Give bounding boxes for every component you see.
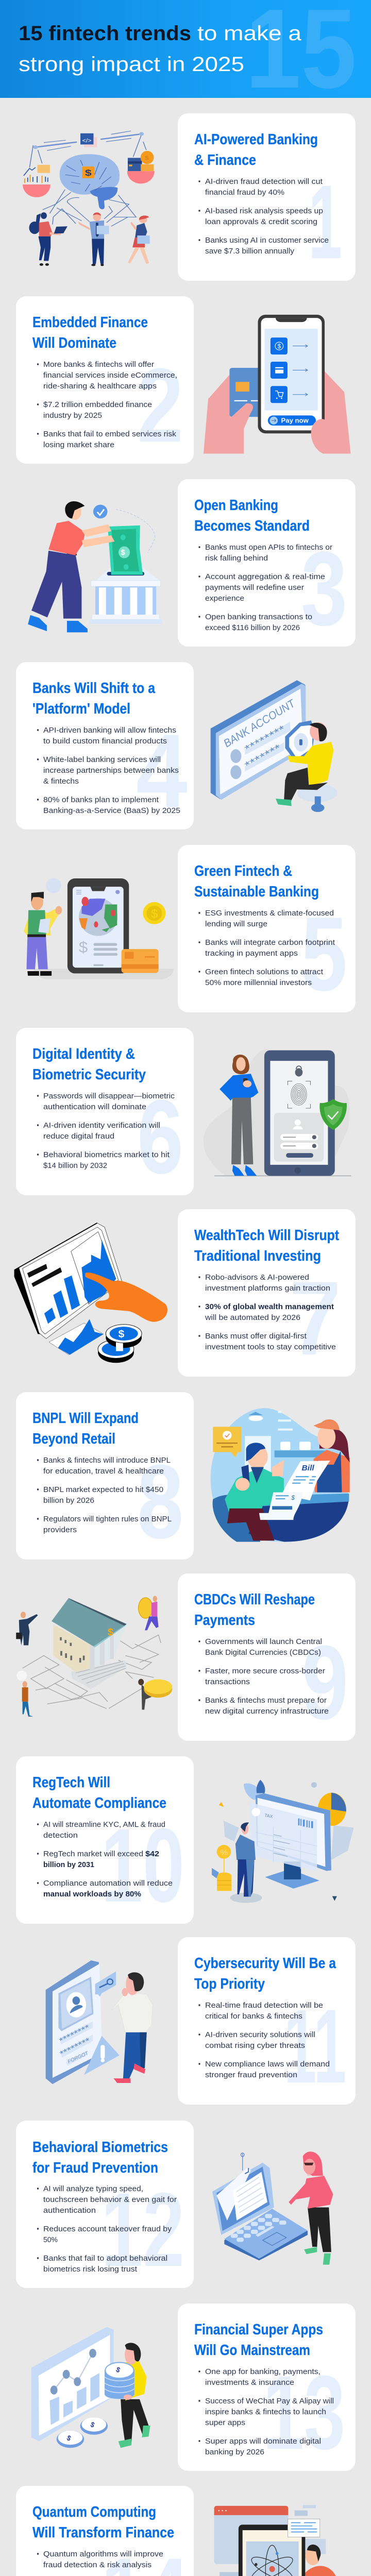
heading: [32, 314, 148, 351]
bullet list: One app for banking, payments,: [205, 2368, 321, 2376]
title: to make a: [197, 22, 302, 45]
panel: 10 regtech: [16, 1756, 194, 1924]
bullet list: investments & insurance: [205, 2379, 294, 2387]
bullet list: [37, 2185, 177, 2274]
bullet list: [37, 1821, 173, 1899]
bullet list: [198, 178, 329, 256]
bullet list: lending will surge: [205, 920, 267, 928]
bullet list: save $7.3 billion annually: [205, 247, 295, 256]
number 7: 7: [289, 1260, 341, 1377]
bullet list: financial services inside eCommerce,: [43, 371, 177, 380]
bullet list: banking by 2026: [205, 2448, 264, 2456]
heading: [194, 497, 310, 534]
bullet list: financial fraud by 40%: [205, 189, 284, 197]
bullet list: tracking in payment apps: [205, 950, 298, 958]
illustration: man and phone login screen: [46, 1960, 153, 2084]
illustration: man reviewing tax form on monitor: [212, 1780, 354, 1903]
bullet list: ESG investments & climate-focused: [205, 909, 334, 918]
heading: [194, 131, 318, 168]
heading: & Finance: [194, 152, 256, 168]
bullet list: [198, 909, 335, 987]
number 3: 3: [301, 530, 347, 648]
bullet list: biometrics risk losing trust: [43, 2265, 137, 2274]
bullet list: Reduces account takeover fraud by: [43, 2225, 172, 2233]
bullet list: industry by 2025: [43, 412, 102, 420]
illustration: phone with globe, man and card: $: [79, 939, 88, 956]
bullet list: Banks & fintechs will introduce BNPL: [43, 1456, 171, 1465]
bullet list: losing market share: [43, 441, 114, 449]
heading: WealthTech Will Disrupt: [194, 1227, 339, 1244]
bullet list: Banks using AI in customer service: [205, 236, 329, 245]
bullet list: risk falling behind: [205, 554, 268, 563]
heading: CBDCs Will Reshape: [194, 1591, 315, 1608]
illustration: monitor chart with hand and coins: [14, 1223, 167, 1363]
panel: 13 super apps: [178, 2303, 356, 2471]
bullet list: 30% of global wealth management: [205, 1303, 334, 1311]
heading: Financial Super Apps: [194, 2321, 323, 2338]
number 12: 12: [101, 2171, 184, 2289]
bullet list: Banking-as-a-Service (BaaS) by 2025: [43, 807, 180, 815]
bullet list: $42: [145, 1850, 159, 1858]
heading: [32, 680, 156, 717]
illustration: AI brain and scales: </>: [82, 138, 92, 144]
bullet list: AI-driven fraud detection will cut: [205, 178, 323, 186]
panel: 7 wealthtech: [178, 1209, 356, 1377]
heading: [32, 2504, 174, 2541]
illustration: man reviewing tax form on monitor: %: [221, 1848, 228, 1857]
heading: Cybersecurity Will Be a: [194, 1955, 336, 1972]
panel: 14 quantum computing: [16, 2486, 194, 2576]
bullet list: Behavioral biometrics market to hit: [43, 1151, 170, 1159]
panel: 6 digital identity: [16, 1028, 194, 1196]
panel: 12 behavioral biometrics: [16, 2121, 194, 2289]
heading: [194, 863, 319, 900]
heading: Banks Will Shift to a: [32, 680, 156, 697]
bullet list: Super apps will dominate digital: [205, 2437, 321, 2446]
number 10: 10: [101, 1807, 184, 1924]
bullet list: payments will redefine user: [205, 584, 304, 592]
bullet list: Real-time fraud detection will be: [205, 2002, 323, 2010]
bullet list: billion by 2026: [43, 1497, 94, 1505]
bullet list: Governments will launch Central: [205, 1638, 322, 1646]
illustration: central bank with circuits and coins: $: [108, 1626, 113, 1638]
number 9: 9: [302, 1624, 348, 1741]
heading: [194, 1955, 336, 1992]
bullet list: exceed $116 billion by 2026: [205, 624, 300, 632]
illustration: phone with pay now and card: $: [278, 343, 281, 350]
bullet list: stronger fraud prevention: [205, 2071, 297, 2079]
illustration: phone with pay now and card: Pay now: [281, 417, 309, 425]
number 2: 2: [137, 347, 183, 464]
bullet list: providers: [43, 1526, 77, 1534]
bullet list: Passwords will disappear—biometric: [43, 1092, 175, 1100]
heading: Traditional Investing: [194, 1248, 321, 1264]
heading: Sustainable Banking: [194, 884, 319, 900]
bullet list: AI-based risk analysis speeds up: [205, 207, 323, 215]
heading: 'Platform' Model: [32, 701, 130, 717]
bullet list: 50%: [43, 2236, 58, 2244]
bullet list: [198, 1274, 336, 1351]
bullet list: Faster, more secure cross-border: [205, 1667, 325, 1675]
bullet list: New compliance laws will demand: [205, 2060, 330, 2069]
illustration: man carrying coins by chart board: [31, 2327, 150, 2448]
bullet list: authentication: [43, 2207, 96, 2215]
woman with laptop: [29, 212, 68, 266]
illustration: man depositing money in bank: [28, 501, 162, 632]
heading: Quantum Computing: [32, 2504, 156, 2520]
bullet list: [37, 361, 177, 449]
illustration: man with tablet and atom: [209, 2505, 352, 2576]
bullet list: Banks & fintechs must prepare for: [205, 1697, 327, 1705]
illustration: hacker phishing laptop: [212, 2151, 333, 2265]
heading: [194, 2321, 323, 2359]
bullet list: RegTech market will exceed: [43, 1850, 143, 1858]
panel: 9 CBDCs: [178, 1573, 356, 1741]
heading: Top Priority: [194, 1976, 265, 1992]
man with orange top left: [16, 1671, 33, 1717]
bullet list: White-label banking services will: [43, 756, 161, 764]
heading: Automate Compliance: [32, 1795, 166, 1811]
illustration: man carrying coins by chart board: $: [89, 2420, 96, 2429]
bullet list: Banks that fail to adopt behavioral: [43, 2255, 167, 2263]
illustration: bank account login with shield: [211, 680, 337, 812]
bullet list: critical for banks & fintechs: [205, 2012, 302, 2021]
heading: BNPL Will Expand: [32, 1410, 139, 1427]
illustration: phone with globe, man and card: [24, 878, 174, 979]
bullet list: Compliance automation will reduce: [43, 1879, 173, 1888]
illustration: man and phone login screen: FORGOT: [67, 2050, 90, 2065]
illustration: AI brain and scales: $: [145, 155, 149, 161]
bullet list: More banks & fintechs will offer: [43, 361, 154, 369]
illustration: central bank with circuits and coins: [16, 1596, 172, 1717]
illustration: man depositing money in bank: $: [121, 549, 125, 557]
bullet list: Banks must open APIs to fintechs or: [205, 544, 332, 552]
number 1: 1: [308, 163, 342, 281]
bullet list: to build custom financial products: [43, 737, 167, 745]
bullet list: reduce digital fraud: [43, 1132, 114, 1141]
heading: AI-Powered Banking: [194, 131, 318, 148]
heading: [194, 1227, 339, 1264]
bullet list: Robo-advisors & AI-powered: [205, 1274, 309, 1282]
title: 15 fintech trends: [19, 22, 191, 45]
heading: RegTech Will: [32, 1774, 110, 1791]
bullet list: Banks must offer digital-first: [205, 1332, 307, 1341]
bullet list: detection: [43, 1832, 78, 1840]
panel: 8 BNPL: [16, 1392, 194, 1561]
bullet list: will be automated by 2026: [205, 1314, 300, 1322]
bullet list: investment tools to stay competitive: [205, 1343, 336, 1351]
illustration: AI brain and scales: [23, 131, 155, 266]
title: [19, 22, 302, 76]
illustration: bank account login with shield: *******: [243, 742, 283, 771]
heading: Digital Identity &: [32, 1046, 135, 1062]
bullet list: manual workloads by 80%: [43, 1890, 141, 1899]
illustration: customer and barista with bill: $: [291, 1495, 295, 1501]
bullet list: [37, 1092, 175, 1170]
bullet list: Banks that fail to embed services risk: [43, 430, 177, 438]
bullet list: fraud detection & risk analysis: [43, 2561, 151, 2569]
bullet list: AI will analyze typing speed,: [43, 2185, 143, 2193]
header banner: [0, 0, 371, 112]
illustration: bank account login with shield: BANK ACCOUNT: [221, 697, 298, 750]
heading: Open Banking: [194, 497, 278, 514]
bullet list: super apps: [205, 2419, 245, 2427]
heading: Biometric Security: [32, 1066, 146, 1083]
bullet list: Banks will integrate carbon footprint: [205, 939, 335, 947]
illustration: man carrying coins by chart board: $: [115, 2365, 122, 2375]
panel: 2 embedded finance: [16, 296, 194, 464]
bullet list: API-driven banking will allow fintechs: [43, 726, 176, 735]
woman with folder: [128, 215, 150, 264]
heading: [194, 1591, 315, 1629]
bullet list: ride-sharing & healthcare apps: [43, 382, 157, 391]
illustration: phone with globe, man and card: $: [151, 907, 158, 920]
heading: Payments: [194, 1612, 255, 1629]
heading: Green Fintech &: [194, 863, 292, 879]
bullet list: [198, 544, 332, 632]
bullet list: [37, 726, 180, 815]
illustration: AI brain and scales: $: [85, 168, 92, 178]
bullet list: [198, 1638, 329, 1716]
bullet list: [198, 2002, 330, 2079]
panel: 1 AI-powered banking: [178, 113, 356, 281]
man carrying big coin top right: [139, 1596, 159, 1630]
bullet list: AI-driven identity verification will: [43, 1122, 160, 1130]
bullet list: [198, 2368, 334, 2456]
number 4: 4: [136, 713, 188, 830]
panel: 11 cybersecurity: [178, 1937, 356, 2105]
illustration: man reviewing tax form on monitor: TAX: [264, 1812, 274, 1819]
woman standing: [220, 1055, 258, 1176]
bullet list: Open banking transactions to: [205, 613, 312, 621]
bullet list: Account aggregation & real-time: [205, 573, 325, 581]
bullet list: Bank Digital Currencies (CBDCs): [205, 1649, 321, 1657]
heading: Embedded Finance: [32, 314, 148, 331]
bullet list: touchscreen behavior & even gait for: [43, 2196, 177, 2204]
bullet list: [37, 1456, 172, 1534]
illustration: customer and barista with bill: Bill: [301, 1464, 314, 1472]
bullet list: combat rising cyber threats: [205, 2042, 305, 2050]
illustration: bank account login with shield: ********: [243, 723, 288, 755]
man with tablet: [24, 892, 62, 976]
illustration: man and phone login screen: ********: [58, 2023, 92, 2046]
bullet list: transactions: [205, 1678, 250, 1686]
bullet list: increase partnerships between banks: [43, 767, 179, 775]
heading: [32, 1774, 166, 1811]
heading: [32, 1046, 146, 1083]
man carrying coin bottom right: [138, 1679, 172, 1709]
bullet list: [37, 2550, 178, 2576]
panel: 5 green fintech: [178, 845, 356, 1013]
bullet list: inspire banks & fintechs to launch: [205, 2408, 326, 2416]
title: strong impact in 2025: [19, 53, 244, 76]
heading: for Fraud Prevention: [32, 2160, 158, 2176]
bullet list: Quantum algorithms will improve: [43, 2550, 163, 2558]
bullet list: for education, travel & healthcare: [43, 1467, 164, 1476]
number 8: 8: [137, 1443, 183, 1561]
heading: [32, 2139, 168, 2176]
panel: 3 open banking: [178, 479, 356, 648]
bullet list: Green fintech solutions to attract: [205, 968, 323, 976]
bullet list: Regulators will tighten rules on BNPL: [43, 1515, 172, 1523]
number 6: 6: [137, 1078, 183, 1196]
bullet list: new digital currency infrastructure: [205, 1707, 329, 1716]
bullet list: AI-driven security solutions will: [205, 2031, 315, 2039]
heading: Behavioral Biometrics: [32, 2139, 168, 2156]
bullet list: $7.2 trillion embedded finance: [43, 401, 152, 409]
heading: Will Go Mainstream: [194, 2342, 310, 2359]
bullet list: & fintechs: [43, 777, 79, 786]
bullet list: AI will streamline KYC, AML & fraud: [43, 1821, 165, 1829]
number 5: 5: [301, 895, 347, 1013]
heading: Becomes Standard: [194, 518, 310, 534]
bullet list: experience: [205, 595, 244, 603]
bullet list: BNPL market expected to hit $450: [43, 1486, 163, 1494]
heading: Beyond Retail: [32, 1431, 115, 1447]
illustration: man and phone login screen: ********: [58, 2036, 92, 2059]
businessman left: [16, 1612, 38, 1645]
bullet list: loan approvals & credit scoring: [205, 218, 317, 226]
bullet list: $14 billion by 2032: [43, 1162, 107, 1170]
illustration: monitor chart with hand and coins: $: [119, 1328, 125, 1340]
bullet list: 80% of banks plan to implement: [43, 796, 159, 804]
illustration: man carrying coins by chart board: $: [65, 2434, 72, 2443]
heading: [32, 1410, 139, 1447]
illustration: phone with pay now and card: [204, 315, 351, 454]
bullet list: 50% more millennial investors: [205, 979, 312, 987]
bullet list: Success of WeChat Pay & Alipay will: [205, 2397, 334, 2405]
heading: Will Dominate: [32, 335, 116, 351]
illustration: fingerprint phone and woman: [204, 1049, 351, 1176]
bullet list: investment platforms gain traction: [205, 1284, 330, 1293]
bullet list: authentication will dominate: [43, 1103, 146, 1111]
panel: 4 platform model: [16, 662, 194, 830]
bullet list: billion by 2031: [43, 1861, 94, 1869]
heading: Will Transform Finance: [32, 2524, 174, 2541]
illustration: customer and barista with bill: [211, 1408, 350, 1542]
man with tablet: [78, 212, 109, 266]
